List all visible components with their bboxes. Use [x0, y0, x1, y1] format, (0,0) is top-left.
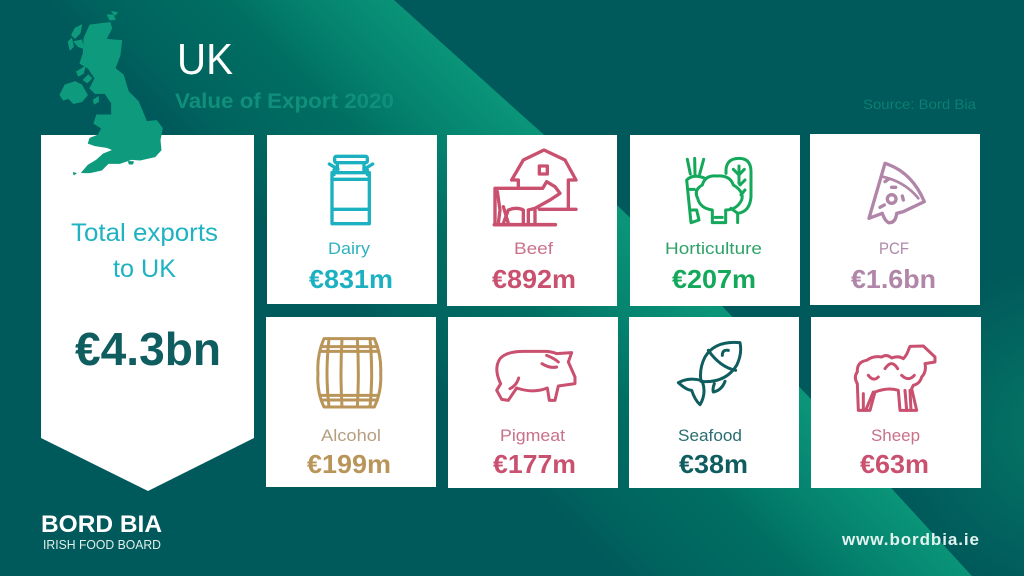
icon: barn and cow	[494, 150, 576, 225]
panel: pigmeat	[448, 317, 618, 488]
icon: vegetables	[687, 158, 751, 223]
dairy label: Dairy	[328, 240, 371, 258]
icon: sheep	[855, 346, 935, 410]
source note: Source: Bord Bia	[863, 96, 976, 112]
panel: alcohol	[266, 317, 436, 487]
total exports value: €4.3bn	[75, 323, 221, 375]
panel: horticulture	[630, 135, 800, 306]
title: UK	[177, 35, 233, 84]
total exports label: Total exports	[71, 219, 218, 247]
panel: beef	[447, 135, 617, 306]
horticulture value: €207m	[672, 264, 756, 294]
seafood value: €38m	[679, 449, 748, 479]
panel: sheep	[811, 317, 981, 488]
logo: Bord Bia: BORD BIA	[41, 511, 162, 538]
sheep label: Sheep	[871, 427, 920, 445]
dairy value: €831m	[309, 264, 393, 294]
sheep value: €63m	[860, 449, 929, 479]
beef value: €892m	[492, 264, 576, 294]
pcf label: PCF	[879, 240, 909, 258]
icon: pizza slice	[869, 163, 924, 223]
panel: seafood	[629, 317, 799, 488]
horticulture label: Horticulture	[665, 240, 762, 258]
pcf value: €1.6bn	[851, 264, 936, 294]
logo: Bord Bia: IRISH FOOD BOARD	[43, 538, 161, 552]
icon: fish	[678, 342, 741, 405]
panel: dairy	[267, 135, 437, 304]
panel: total exports	[41, 135, 254, 491]
icon: barrel	[318, 339, 381, 407]
icon: UK map	[60, 12, 162, 175]
pigmeat label: Pigmeat	[500, 427, 565, 445]
icon: pig	[497, 351, 575, 400]
total exports label line 2: to UK	[113, 255, 176, 283]
website: www.bordbia.ie	[841, 530, 979, 549]
icon: milk churn	[329, 156, 373, 224]
seafood label: Seafood	[678, 427, 742, 445]
panel: pcf	[810, 134, 980, 305]
alcohol value: €199m	[307, 449, 391, 479]
logo: Bord Bia	[41, 511, 162, 552]
pigmeat value: €177m	[493, 449, 576, 479]
subtitle: Value of Export 2020	[175, 90, 394, 113]
beef label: Beef	[514, 240, 553, 258]
alcohol label: Alcohol	[321, 427, 381, 445]
